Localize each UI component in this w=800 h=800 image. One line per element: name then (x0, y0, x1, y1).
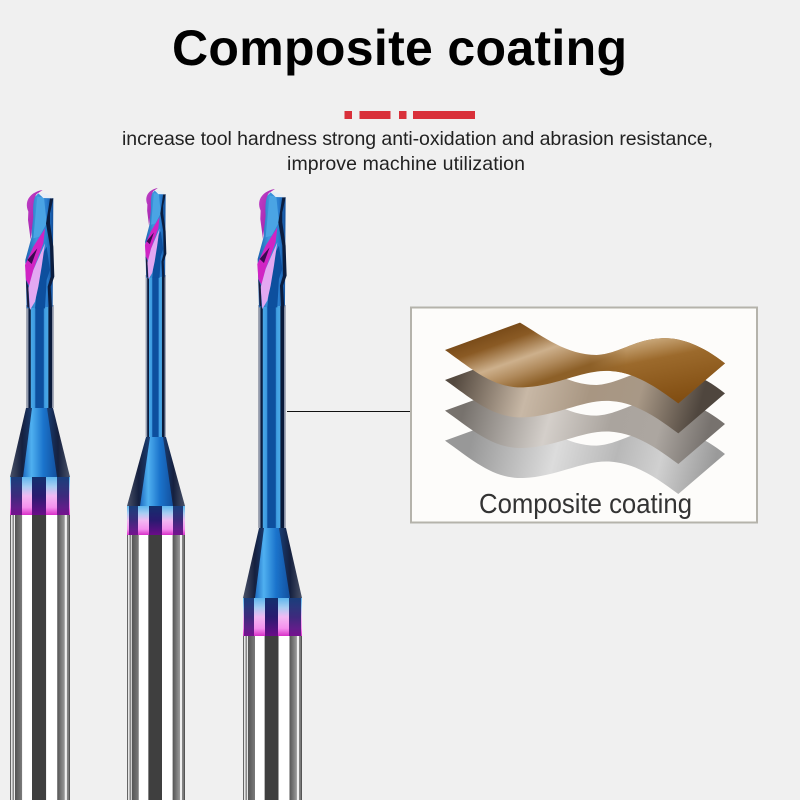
flute tip (25, 190, 54, 310)
end mill 2 (127, 188, 185, 800)
subtitle text: improve machine utilization (287, 153, 525, 175)
coating layers (445, 323, 725, 494)
title: Composite coating (172, 20, 627, 76)
panel caption: Composite coating (479, 488, 692, 519)
panel: composite coating diagram (411, 308, 757, 522)
subtitle text (122, 128, 713, 175)
red dashed accent (344, 111, 475, 119)
flute tip (257, 189, 287, 309)
end mill 3 (243, 189, 302, 800)
flute tip (145, 188, 166, 279)
end mill 1 (10, 190, 70, 800)
leader line (287, 411, 411, 412)
subtitle text: increase tool hardness strong anti-oxidation and abrasion resistance, (122, 128, 713, 150)
